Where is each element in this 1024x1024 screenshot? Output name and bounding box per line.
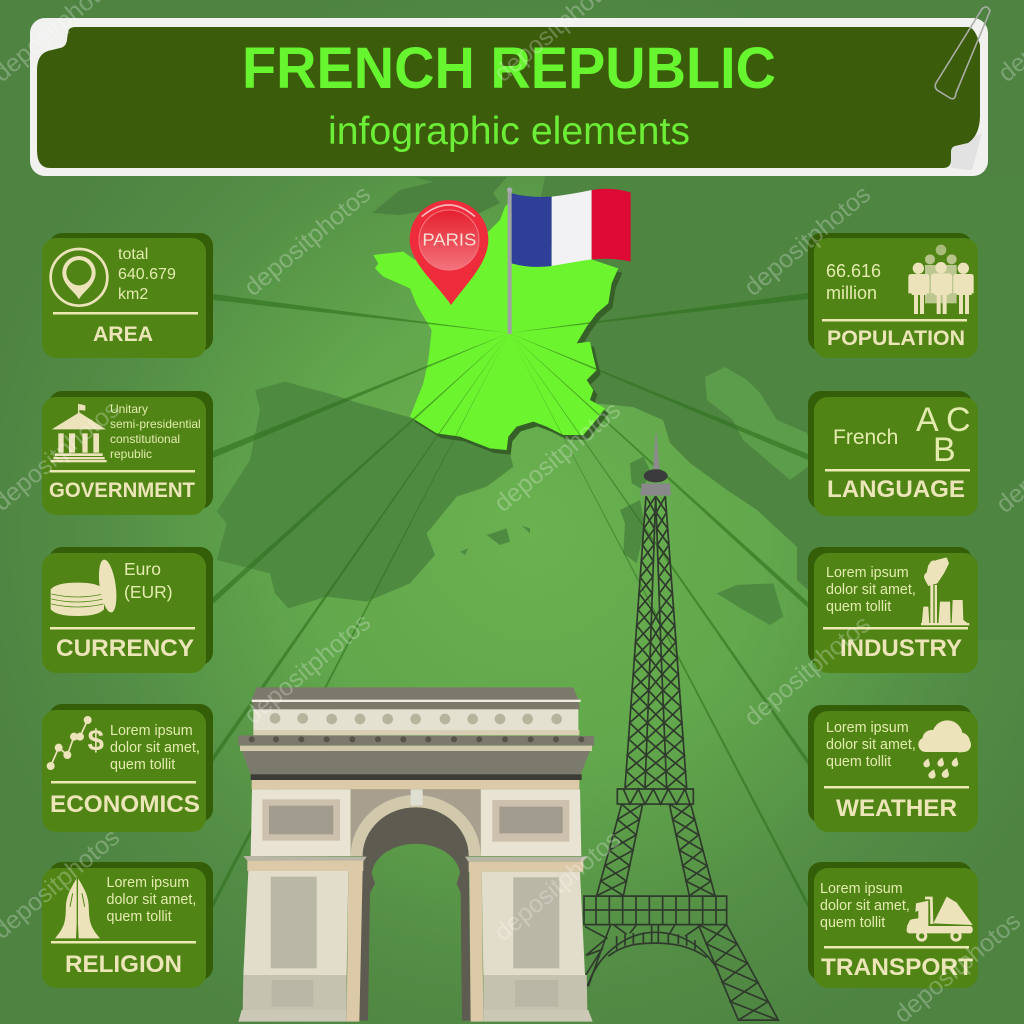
banner frame [30, 18, 988, 176]
transport text [820, 881, 910, 931]
government label: GOVERNMENT [49, 479, 195, 502]
economics text: dolor sit amet, [110, 740, 200, 756]
economics label: ECONOMICS [50, 791, 200, 818]
government value: republic [110, 447, 152, 461]
weather text: dolor sit amet, [826, 737, 916, 753]
flag cloth [512, 189, 631, 267]
flag of France [507, 187, 631, 334]
government value: constitutional [110, 432, 180, 446]
panel: economics [42, 704, 213, 832]
map: France [373, 203, 622, 455]
weather label: WEATHER [836, 795, 957, 822]
Arc de Triomphe [238, 687, 595, 1022]
watermarks: depositphotos [489, 825, 626, 947]
economics text [110, 723, 200, 773]
land: islands [620, 457, 783, 625]
transport text: dolor sit amet, [820, 898, 910, 914]
watermarks: depositphotos [739, 610, 876, 732]
population value [826, 261, 881, 303]
icon: government building [51, 404, 107, 462]
language label: LANGUAGE [827, 476, 965, 503]
arch cornice [238, 735, 595, 789]
tower first platform [617, 789, 693, 804]
panel: government [42, 391, 213, 515]
land: Iberia [217, 382, 530, 608]
land: central Europe and Italy [520, 176, 1024, 640]
panel: language [808, 391, 978, 516]
tower middle legs [597, 804, 715, 896]
icon: letters A B C: B [933, 431, 956, 469]
religion label: RELIGION [65, 951, 182, 978]
arch upper walls [251, 789, 581, 856]
transport text: quem tollit [820, 915, 885, 931]
government value [110, 402, 201, 461]
icon: letters A B C [916, 401, 971, 469]
icon: coins [51, 558, 119, 616]
weather text [826, 720, 916, 770]
icon: letters A B C: C [946, 401, 971, 439]
icon: factory [921, 557, 969, 625]
tower upper section lattice [625, 496, 687, 788]
currency value: (EUR) [124, 582, 173, 602]
religion text [106, 875, 196, 925]
currency value: Euro [124, 559, 161, 579]
icon: growth chart with dollar [47, 716, 104, 770]
population label: POPULATION [827, 327, 965, 350]
icon: growth chart with dollar: $ [88, 725, 104, 758]
government value: semi-presidential [110, 417, 201, 431]
title banner [30, 7, 990, 176]
economics text: quem tollit [110, 757, 175, 773]
area value: 640.679 [118, 266, 176, 283]
tower antenna and cap [640, 428, 671, 496]
Eiffel Tower [584, 428, 778, 1020]
tower second platform [584, 896, 727, 925]
area value: total [118, 246, 148, 263]
icon: praying hands [55, 878, 100, 938]
religion text: Lorem ipsum [106, 875, 189, 891]
currency label: CURRENCY [56, 635, 194, 662]
map pin: Paris [410, 200, 488, 305]
weather text: quem tollit [826, 754, 891, 770]
panel: industry [808, 547, 978, 673]
weather text: Lorem ipsum [826, 720, 909, 736]
subtitle: infographic elements [328, 110, 690, 153]
icon: rain cloud [918, 720, 971, 779]
panel: religion [42, 862, 213, 988]
watermarks: depositphotos [489, 396, 626, 518]
panel: weather [808, 705, 978, 832]
population value: 66.616 [826, 261, 881, 281]
map: surrounding land [217, 176, 1024, 640]
arch right pier [465, 857, 593, 1022]
watermarks: depositphotos [739, 180, 876, 302]
industry label: INDUSTRY [840, 635, 962, 662]
economics text: Lorem ipsum [110, 723, 193, 739]
population value: million [826, 283, 877, 303]
area value [118, 246, 176, 303]
banner fold [951, 133, 982, 170]
panel: transport [808, 862, 978, 988]
religion text: dolor sit amet, [106, 892, 196, 908]
transport text: Lorem ipsum [820, 881, 903, 897]
industry text [826, 565, 916, 615]
currency value [124, 559, 173, 602]
paper clip [935, 7, 990, 99]
tower base arch and legs [585, 925, 778, 1020]
map pin: Paris: PARIS [422, 229, 476, 249]
icon: dump truck [907, 897, 973, 942]
religion text: quem tollit [106, 909, 172, 925]
panel: area [42, 233, 213, 358]
title: FRENCH REPUBLIC [242, 36, 776, 101]
arch attic [252, 687, 581, 735]
land: Britain [372, 177, 507, 215]
watermarks: depositphotos [239, 180, 376, 302]
icon: map pin in circle [51, 249, 107, 306]
banner panel [37, 27, 980, 168]
industry text: Lorem ipsum [826, 565, 909, 581]
area value: km2 [118, 286, 148, 303]
arch left pier [238, 856, 367, 1022]
panel: population [808, 233, 978, 358]
connector lines [213, 293, 808, 908]
government value: Unitary [110, 402, 148, 416]
transport label: TRANSPORT [821, 954, 973, 981]
icon: group of people [908, 245, 974, 314]
language value: French [833, 426, 898, 449]
industry text: quem tollit [826, 599, 891, 615]
icon: letters A B C: A [916, 401, 939, 439]
watermarks: depositphotos [239, 608, 376, 730]
panel: currency [42, 547, 213, 673]
industry text: dolor sit amet, [826, 582, 916, 598]
arch inner vault [359, 807, 471, 1021]
flag pole [507, 187, 512, 334]
area label: AREA [93, 323, 153, 346]
sea: Adriatic [705, 367, 813, 480]
